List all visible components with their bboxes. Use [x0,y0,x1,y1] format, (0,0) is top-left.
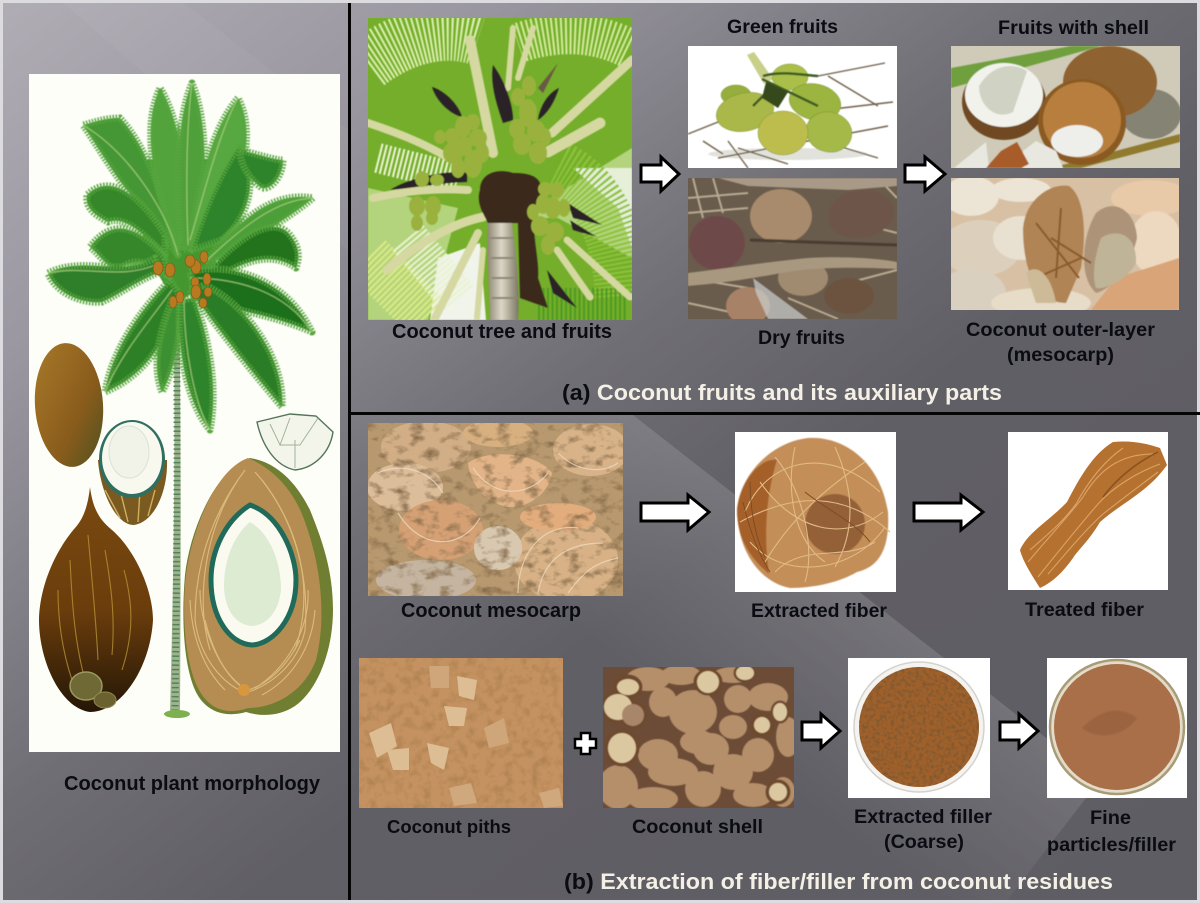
caption: extracted filler coarse [854,806,992,853]
heading: (a): (a) Coconut fruits and its auxiliary parts [562,380,1002,405]
photo: coconut tree and fruits [368,18,632,320]
caption: coconut outer-layer [966,319,1155,366]
photo: treated fiber [1008,432,1168,590]
caption: extracted filler coarse: (Coarse) [884,831,964,853]
panel: (b) extraction of fiber and filler [359,419,1187,894]
icon: whole coconut, upper left [31,341,107,469]
photo: coconut piths [359,658,563,808]
photo: coconut outer layer [951,178,1179,310]
illustration: palm and coconut botanical plate [29,74,340,752]
caption: coconut outer-layer: (mesocarp) [1007,344,1114,366]
photo: extracted coarse filler [848,658,990,798]
icon: coconut cross-section [183,458,333,715]
caption: dry fruits: Dry fruits [758,327,845,349]
icon: plus sign [575,733,596,754]
photo: coconut mesocarp [368,423,623,596]
heading: fruits with shell: Fruits with shell [998,17,1149,39]
panel: (a) coconut fruits and auxiliary parts [368,16,1191,405]
divider lines [348,3,1200,900]
icon: palm fronds [48,83,313,430]
arrow: fiber to treated fiber [914,495,983,530]
icon: husked dark coconut [39,487,153,712]
photo: fruits with shell [951,46,1180,168]
caption: coconut piths: Coconut piths [387,816,511,837]
photo: dry fruits [688,178,897,319]
photo: coconut shell [603,667,794,808]
photo: fine particles [1047,658,1187,798]
caption: extracted filler coarse: Extracted filler [854,806,992,828]
caption: treated fiber: Treated fiber [1025,599,1144,621]
caption: fine particles/filler [1047,807,1176,856]
arrow: shell to coarse filler [802,714,840,748]
heading: green fruits: Green fruits [727,16,838,38]
arrow: coarse filler to fine particles [1000,714,1038,748]
caption: coconut plant morphology: Coconut plant morphology [64,773,321,795]
arrow: tree to fruits [641,157,679,191]
arrow: mesocarp to fiber [641,495,709,530]
icon: coconut shell piece [257,414,333,470]
caption: extracted fiber: Extracted fiber [751,600,887,622]
caption: coconut outer-layer: Coconut outer-layer [966,319,1155,341]
caption: coconut tree and fruits: Coconut tree and fruits [392,321,612,343]
photo: green fruits [688,46,897,168]
arrow: fruits to shells [905,157,945,191]
icon: fruit cluster [153,251,212,308]
caption: fine particles/filler: particles/filler [1047,834,1176,856]
caption: coconut shell: Coconut shell [632,816,763,838]
icon: halved coconut [98,420,167,525]
panel: coconut plant morphology [29,74,340,795]
photo: extracted fiber [735,432,896,592]
caption: fine particles/filler: Fine [1090,807,1131,829]
icon: palm trunk [164,280,190,718]
caption: coconut mesocarp: Coconut mesocarp [401,600,581,622]
dark centre of crown [479,171,548,308]
heading: (b): (b) Extraction of fiber/filler from coconut residues [564,869,1113,894]
